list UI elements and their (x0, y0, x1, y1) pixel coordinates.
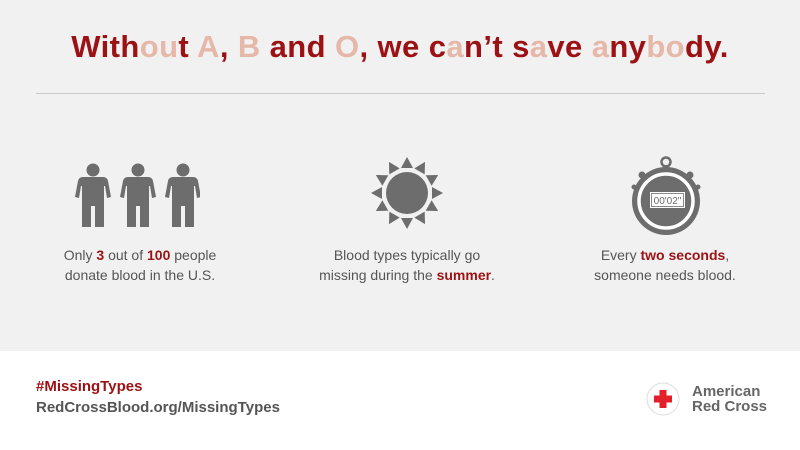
title: Without A, B and O, we can’t save anybody. (71, 29, 729, 64)
caption: sun: missing during the summer. (319, 267, 495, 283)
caption: people (64, 247, 216, 283)
caption: people: Only 3 out of 100 people (64, 247, 216, 263)
icon: three people (75, 164, 200, 227)
caption: people: donate blood in the U.S. (65, 267, 215, 283)
icon: stopwatch: 00'02" (654, 196, 682, 207)
caption: sun: Blood types typically go (334, 247, 480, 263)
logo (646, 382, 767, 416)
caption: stopwatch: someone needs blood. (594, 267, 736, 283)
logo: Red Cross (692, 398, 767, 415)
caption: sun (319, 247, 495, 283)
caption: stopwatch (594, 247, 736, 283)
icon: stopwatch (632, 156, 700, 235)
icon: sun (371, 157, 443, 229)
hashtag: #MissingTypes (36, 378, 142, 395)
logo: American (692, 383, 760, 400)
url: RedCrossBlood.org/MissingTypes (36, 399, 280, 416)
caption: stopwatch: Every two seconds, (601, 247, 729, 263)
